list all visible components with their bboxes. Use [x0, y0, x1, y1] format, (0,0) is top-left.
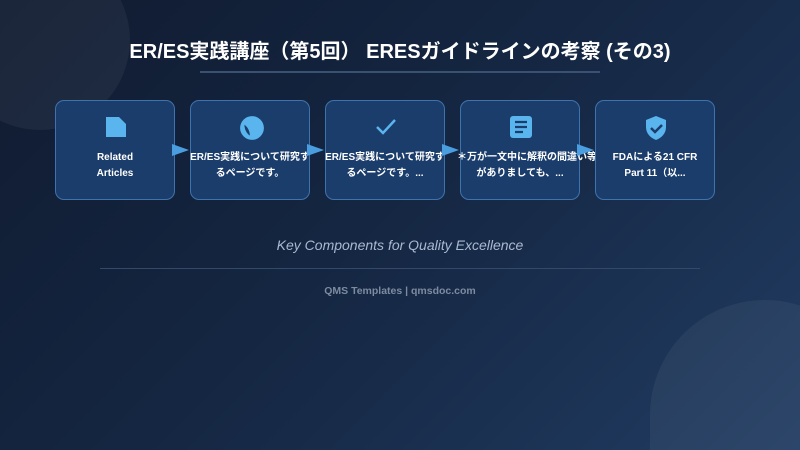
arrow 1: [172, 144, 189, 156]
step 5: Part 11（以...: [624, 168, 686, 179]
step 3: [325, 100, 445, 200]
step 4: [460, 100, 580, 200]
step 3: ER/ES実践について研究す: [325, 152, 445, 163]
footer: QMS Templates | qmsdoc.com: [324, 285, 476, 297]
arrow 2: [307, 144, 324, 156]
step 2: るページです。: [216, 168, 284, 179]
arrow 3: [442, 144, 459, 156]
step 5: FDAによる21 CFR: [613, 152, 697, 163]
step 5: [595, 100, 715, 200]
step 1: [55, 100, 175, 200]
title: ER/ES実践講座（第5回） ERESガイドラインの考察 (その3): [129, 41, 671, 63]
step 2: ER/ES実践について研究す: [190, 152, 310, 163]
step 4: ＊万が一文中に解釈の間違い等: [457, 152, 597, 163]
step 3: るページです。...: [346, 168, 424, 179]
step 1: Related: [97, 152, 133, 163]
step 1: Articles: [97, 168, 133, 179]
step 4: がありましても、...: [476, 168, 564, 179]
step 2: [190, 100, 310, 200]
subtitle: Key Components for Quality Excellence: [277, 237, 523, 253]
arrow 4: [577, 144, 594, 156]
